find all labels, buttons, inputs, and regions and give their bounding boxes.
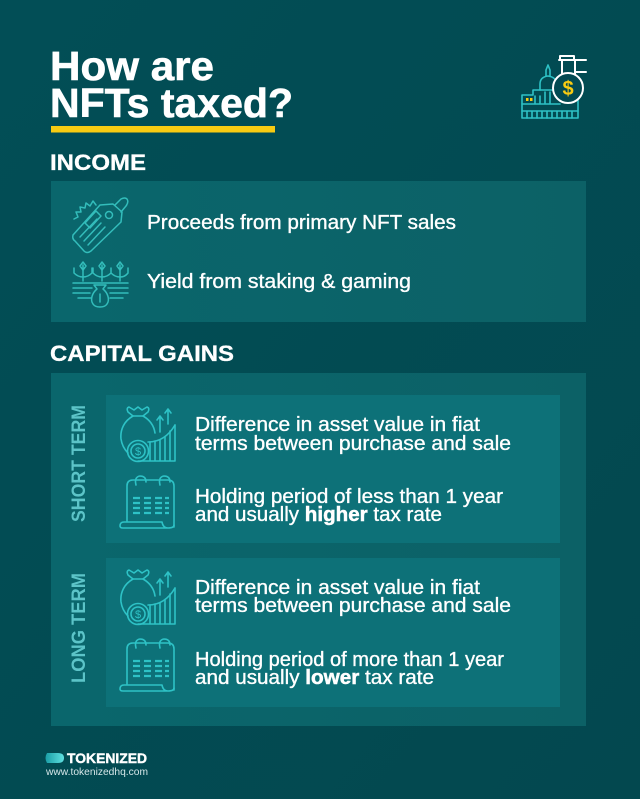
- label: long term: LONG TERM: [69, 573, 90, 683]
- icon: money bag with growth: [121, 570, 175, 624]
- text: website: www.tokenizedhq.com: [45, 767, 148, 778]
- icon: logo mark: [46, 753, 64, 763]
- text: short term holding: Holding period of less than 1 year: [195, 486, 503, 508]
- icon: capitol building and money flask: [522, 56, 586, 118]
- text: short term difference: terms between purchase and sale: [195, 433, 511, 455]
- text: long term holding: Holding period of more than 1 year: [195, 649, 504, 671]
- panel: capital gains: [51, 373, 586, 726]
- text: long term holding: [195, 649, 504, 689]
- icon: calendar: [120, 639, 174, 691]
- heading: capital gains: CAPITAL GAINS: [50, 341, 234, 366]
- text: short term holding: [195, 486, 503, 526]
- icon: price tag: [73, 198, 128, 252]
- text: long term difference: [195, 577, 511, 617]
- text: long term difference: Difference in asset value in fiat: [195, 577, 480, 599]
- text: short term difference: [195, 414, 511, 455]
- logo: tokenized: [45, 751, 148, 778]
- panel: long term: [69, 558, 560, 707]
- icon: money bag with growth: [121, 407, 175, 462]
- icon: yield crops and money bag: [73, 262, 128, 307]
- heading: income: INCOME: [50, 150, 146, 175]
- panel: short term: $: [135, 446, 141, 458]
- panel: long term: $: [135, 609, 141, 621]
- panel: short term: [69, 395, 560, 543]
- panel: income: [51, 181, 586, 322]
- icon: capitol building and money flask: $: [562, 78, 574, 100]
- title: [50, 43, 293, 126]
- text: proceeds: Proceeds from primary NFT sales: [147, 212, 456, 234]
- title: How are: [50, 43, 214, 89]
- text: long term difference: terms between purchase and sale: [195, 595, 511, 617]
- text: long term holding: and usually lower tax rate: [195, 667, 434, 689]
- logo: tokenized: TOKENIZED: [67, 751, 147, 766]
- label: short term: SHORT TERM: [69, 405, 90, 522]
- text: short term holding: and usually higher tax rate: [195, 504, 442, 526]
- text: short term difference: Difference in asset value in fiat: [195, 414, 480, 436]
- text: yield: Yield from staking & gaming: [147, 271, 411, 293]
- title underline: [51, 126, 275, 132]
- title: NFTs taxed?: [50, 80, 293, 126]
- icon: calendar: [120, 476, 174, 528]
